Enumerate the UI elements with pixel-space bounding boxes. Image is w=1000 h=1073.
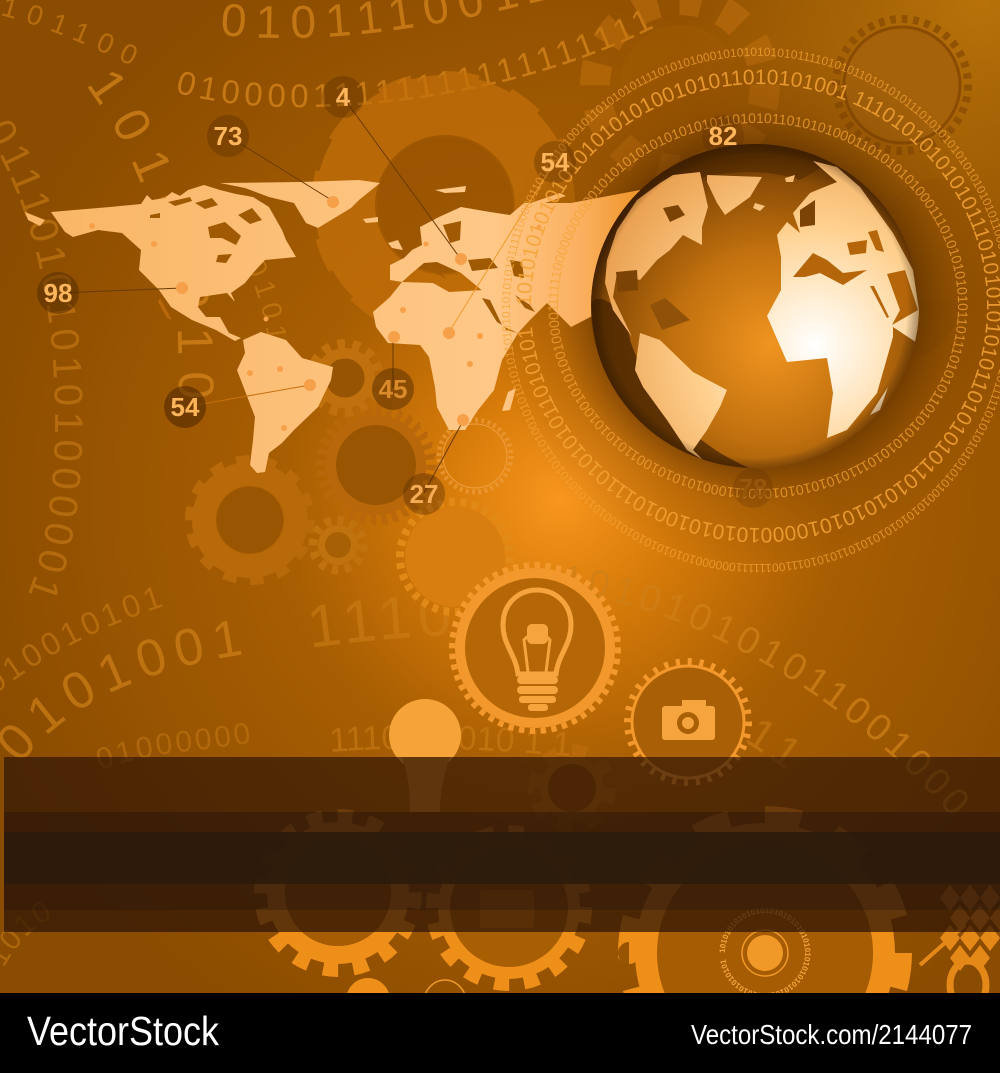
badge 54 bottom: 54 <box>171 392 200 422</box>
badge 73 <box>207 115 249 157</box>
binary rings around globe <box>502 48 1000 572</box>
icon: camera gear <box>628 662 748 782</box>
band: central dark <box>4 832 1000 884</box>
horizontal bands <box>4 757 1000 932</box>
gear: right of globe <box>840 178 1000 360</box>
gear: small behind bars <box>534 750 610 826</box>
gear: small beside South America <box>311 344 379 412</box>
band: lower <box>4 910 1000 932</box>
Arctic coast fleck <box>525 193 566 208</box>
globe shadow crescent <box>592 299 755 470</box>
gear: top right ring <box>836 19 968 151</box>
badge 45: 45 <box>379 374 407 404</box>
gear: sunburst centre <box>318 407 434 523</box>
Svalbard <box>435 186 466 193</box>
badge 27: 27 <box>410 479 438 509</box>
binary code arcs: 101010101011001000 <box>568 566 968 812</box>
binary code arcs: 01000000 <box>97 723 249 768</box>
map dots <box>89 196 542 431</box>
map seas and lakes <box>150 197 535 325</box>
halo around globe <box>490 41 1000 571</box>
Africa <box>373 282 518 430</box>
badge 54 bottom <box>164 386 206 428</box>
logo: VectorStock <box>27 1008 219 1054</box>
badge 45 <box>372 368 414 410</box>
gear: bottom left <box>262 817 414 969</box>
badge 54 top <box>534 141 576 183</box>
band: lower middle <box>4 884 1000 910</box>
gear: bottom middle <box>434 833 584 983</box>
badge 82: 82 <box>709 121 737 151</box>
gear: thin ring under Africa <box>439 420 511 492</box>
badge 4: 4 <box>336 82 351 112</box>
badge 4 <box>322 76 364 118</box>
gear: top centre right <box>595 0 765 170</box>
Iceland <box>363 217 378 223</box>
gear: translucent centre <box>400 502 510 612</box>
globe <box>591 144 920 470</box>
badge 73: 73 <box>214 121 242 151</box>
camera <box>662 700 715 740</box>
small binary ring: 1010101010101010101010101010101010101010101010101010101 <box>720 908 810 993</box>
binary code arcs: 1110 <box>312 597 448 648</box>
gear: small under centre <box>313 520 363 570</box>
ring: inner: 1111100000000000101010101010101010110101011010101000110101010100011101010101010110111010101101010101010111010101010101011100010101010011010101001010100100001010101010101010101101011011010101001010110110101010101010101011010101 <box>548 113 968 499</box>
icon: faint lightbulb <box>389 699 461 812</box>
badge 78: 78 <box>739 473 767 503</box>
binary code arcs: 10101010 <box>88 72 214 398</box>
binary code arcs: 01011 <box>743 706 798 757</box>
badge 27 <box>403 473 445 515</box>
binary code arcs: 01000011111111111111111 <box>178 10 654 108</box>
binary code arcs: 0101 <box>251 262 286 335</box>
badge 82 <box>702 115 744 157</box>
UK <box>388 240 403 250</box>
ring: middle: 10101010101010101010100101011010101001 1110101010101011101010101010110101010110101010101000010101010010111010101011010101 <box>516 70 1000 543</box>
badge 54 top: 54 <box>541 147 570 177</box>
North America <box>51 185 296 341</box>
badge 98 <box>37 272 79 314</box>
badge 78 <box>733 468 773 508</box>
gear: bottom right large <box>618 806 912 993</box>
diamond pattern <box>918 886 1000 993</box>
icon: lightbulb gear <box>452 565 618 731</box>
binary code arcs: 1110101010 1 1 <box>332 726 569 756</box>
lightbulb <box>503 590 571 711</box>
band: upper middle <box>4 812 1000 832</box>
Alaska islands <box>25 212 45 226</box>
badge 98: 98 <box>44 278 72 308</box>
globe land <box>605 161 920 460</box>
Madagascar <box>502 388 516 411</box>
gear: left with spokes <box>190 460 310 580</box>
Eurasia <box>390 190 640 333</box>
world map <box>25 180 640 473</box>
gear: large behind Europe <box>323 83 567 327</box>
footer bar <box>0 993 1000 1073</box>
gear: cut off at bottom <box>347 978 466 993</box>
band: upper <box>4 757 1000 812</box>
map connector lines <box>58 97 555 493</box>
South America <box>237 332 333 473</box>
globe seas <box>616 200 918 330</box>
Greenland <box>220 180 380 228</box>
number badges <box>37 76 773 515</box>
